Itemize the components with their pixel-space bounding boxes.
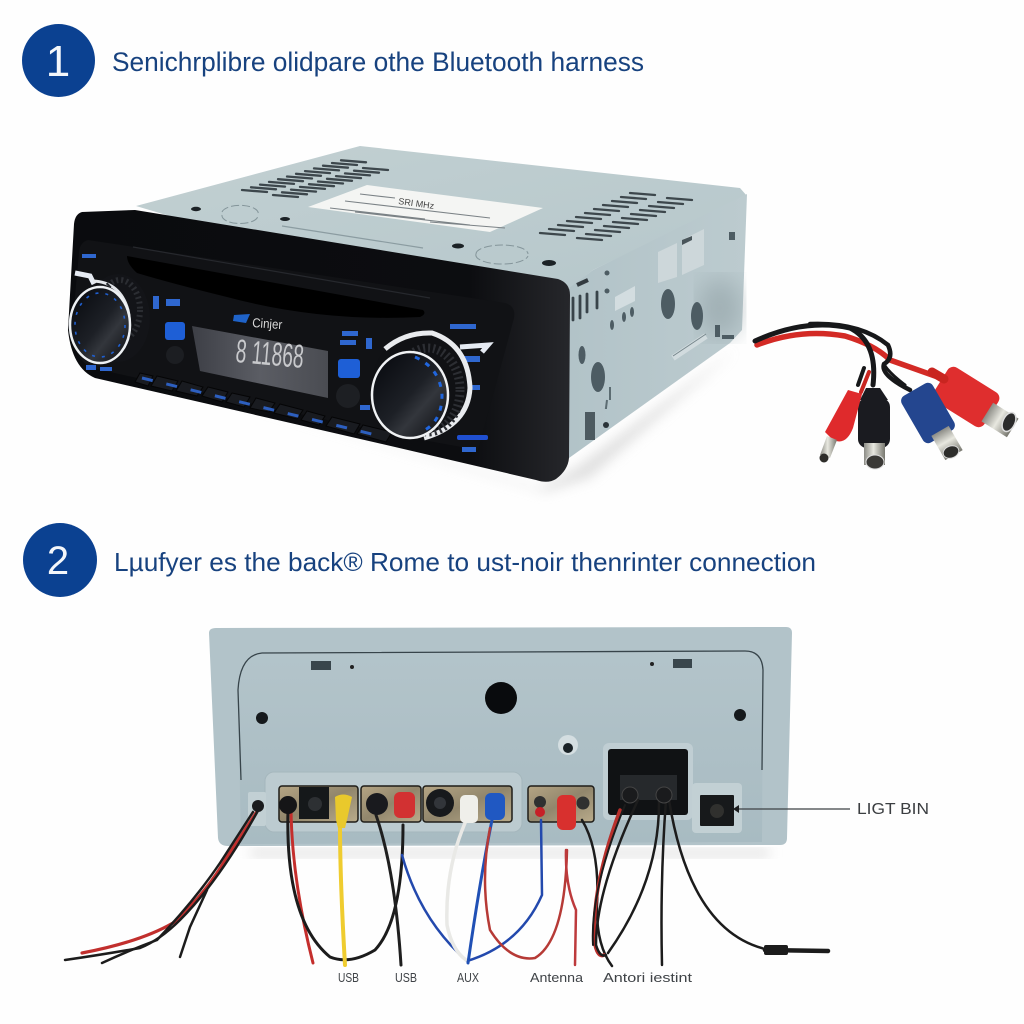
chassis top panel [136, 146, 747, 288]
step 1 number badge: 1 [46, 37, 70, 86]
light bin socket [692, 783, 742, 833]
connector labels: Antori iestint [603, 970, 692, 985]
black plug [858, 388, 890, 469]
red plug small [820, 390, 862, 462]
left volume knob [70, 274, 150, 363]
step 1 heading: Senichrplibre olidpare othe Bluetooth harness [112, 47, 644, 77]
power connector block [603, 743, 693, 820]
red plug large [930, 364, 1019, 437]
illustration: rear panel with wiring [65, 627, 828, 966]
rear panel body [209, 627, 792, 846]
step 2 heading: Lµufyer es the back® Rome to ust-noir thenrinter connection [114, 547, 816, 577]
connector labels: USB [338, 970, 359, 985]
illustration: RCA cable bundle [755, 324, 1019, 469]
chassis top panel: SRI MHz [398, 196, 435, 211]
faceplate [68, 210, 570, 482]
blue plug [899, 381, 963, 460]
callout: LIGT BIN [733, 801, 929, 818]
connector labels: USB [395, 970, 417, 985]
disc slot [127, 256, 424, 318]
LCD display: 8 11868 [234, 332, 305, 375]
logo [233, 314, 283, 332]
chassis side panel [569, 194, 747, 458]
panel shadow [250, 848, 770, 858]
unit shadow [70, 350, 735, 492]
step 2 number badge: 2 [47, 539, 69, 583]
right tuning knob [372, 332, 472, 438]
cables [65, 800, 828, 966]
connector plate housing [248, 772, 594, 832]
step 2 number badge [23, 523, 97, 597]
plugs [252, 787, 788, 955]
LCD display [192, 326, 328, 398]
blue buttons and labels [75, 254, 488, 452]
illustration: car stereo head unit [68, 146, 747, 492]
cables [755, 324, 935, 392]
connector labels: Antenna [530, 970, 584, 985]
logo: Cinjer [252, 315, 283, 332]
step 1 number badge [22, 24, 95, 97]
callout: LIGT BIN: LIGT BIN [857, 801, 929, 818]
connector labels: AUX [457, 970, 479, 985]
connector labels [338, 970, 692, 985]
